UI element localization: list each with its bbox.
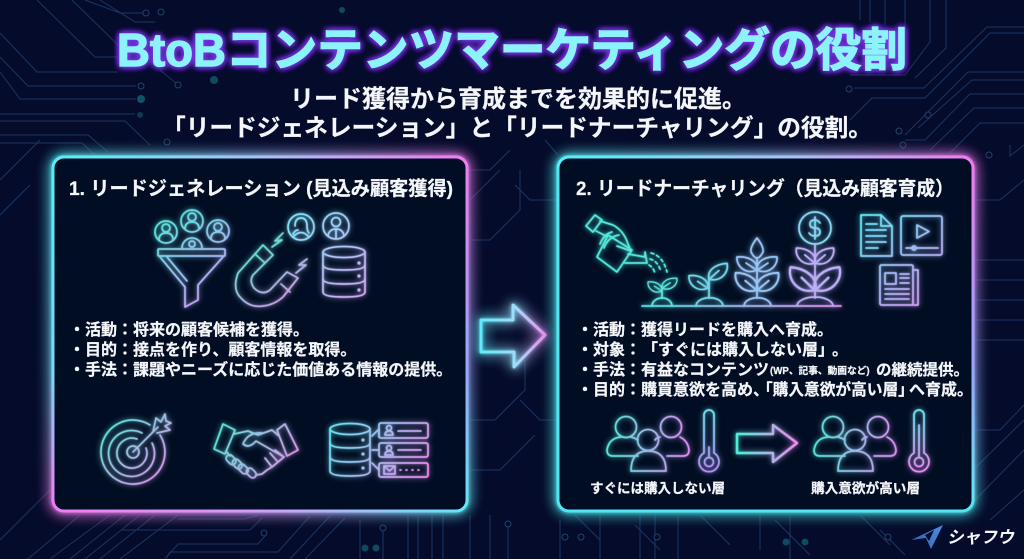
icon: growing plants bbox=[642, 212, 843, 306]
title: BtoBコンテンツマーケティングの役割 bbox=[117, 24, 907, 76]
arrow: before to after bbox=[737, 425, 797, 462]
bullet list: ・目的：接点を作り、顧客情報を取得。 bbox=[69, 340, 356, 359]
panel frame bbox=[558, 157, 973, 511]
icon: funnel with people bbox=[155, 210, 229, 307]
icon: document bbox=[861, 215, 892, 256]
bullet list: 。 bbox=[832, 342, 848, 359]
bullet list: の継続提供。 bbox=[876, 361, 969, 379]
icon: database bbox=[323, 246, 365, 297]
logo wordmark: シャフウ bbox=[946, 527, 1017, 547]
caption: before: すぐには購入しない層 bbox=[590, 480, 725, 496]
heading: 2. リードナーチャリング（見込み顧客育成） bbox=[576, 177, 954, 200]
icon: prospect avatars bbox=[288, 213, 349, 240]
icon: low thermometer bbox=[699, 410, 719, 472]
bullet list: ・手法：課題やニーズに応じた価値ある情報の提供。 bbox=[69, 360, 452, 379]
logo bbox=[911, 525, 1017, 549]
icon: handshake bbox=[214, 424, 298, 479]
icon: high thermometer bbox=[909, 410, 929, 472]
icon: audience after bbox=[814, 416, 896, 471]
bullet list bbox=[69, 320, 452, 379]
icon: magnet bbox=[236, 233, 307, 306]
icon: news article bbox=[880, 265, 918, 305]
icon: audience before bbox=[607, 416, 689, 471]
bullet list: 「すぐには購入しない層」 bbox=[642, 341, 834, 359]
bullet list: ・対象： bbox=[577, 342, 641, 359]
panel: lead generation bbox=[53, 157, 467, 511]
ground line bbox=[642, 305, 841, 307]
bullet list bbox=[577, 320, 973, 399]
icon: target bbox=[101, 414, 171, 484]
caption: after: 購入意欲が高い層 bbox=[811, 480, 920, 496]
plant 4 with coin bbox=[787, 212, 843, 306]
plant 3 bbox=[734, 238, 780, 306]
bullet list: 「購入意欲が高い層」 bbox=[757, 380, 914, 399]
plant 2 bbox=[689, 263, 729, 306]
subtitle: 「リードジェネレーション」と「リードナーチャリング」の役割。 bbox=[162, 114, 872, 142]
panel: lead nurturing bbox=[558, 157, 973, 511]
icon: database with records bbox=[330, 423, 428, 477]
subtitle: リード獲得から育成までを効果的に促進。 bbox=[290, 86, 746, 113]
plant 1 bbox=[648, 278, 677, 306]
bullet list: ・活動：将来の顧客候補を獲得。 bbox=[69, 320, 309, 339]
icon: watering can bbox=[586, 215, 667, 273]
logo mark bbox=[911, 525, 943, 549]
bullet list: へ育成。 bbox=[909, 380, 973, 399]
bullet list: ・手法：有益なコンテンツ bbox=[577, 362, 769, 379]
bullet list: (WP、記事、動画など) bbox=[770, 364, 870, 377]
icon: video bbox=[901, 216, 942, 255]
subtitle bbox=[162, 86, 872, 142]
bullet list: ・活動：獲得リードを購入へ育成。 bbox=[577, 320, 833, 339]
bullet list: ・目的：購買意欲を高め、 bbox=[577, 382, 769, 399]
arrow between panels bbox=[481, 305, 545, 367]
panel frame bbox=[53, 157, 467, 511]
heading: 1. リードジェネレーション (見込み顧客獲得) bbox=[69, 178, 453, 200]
